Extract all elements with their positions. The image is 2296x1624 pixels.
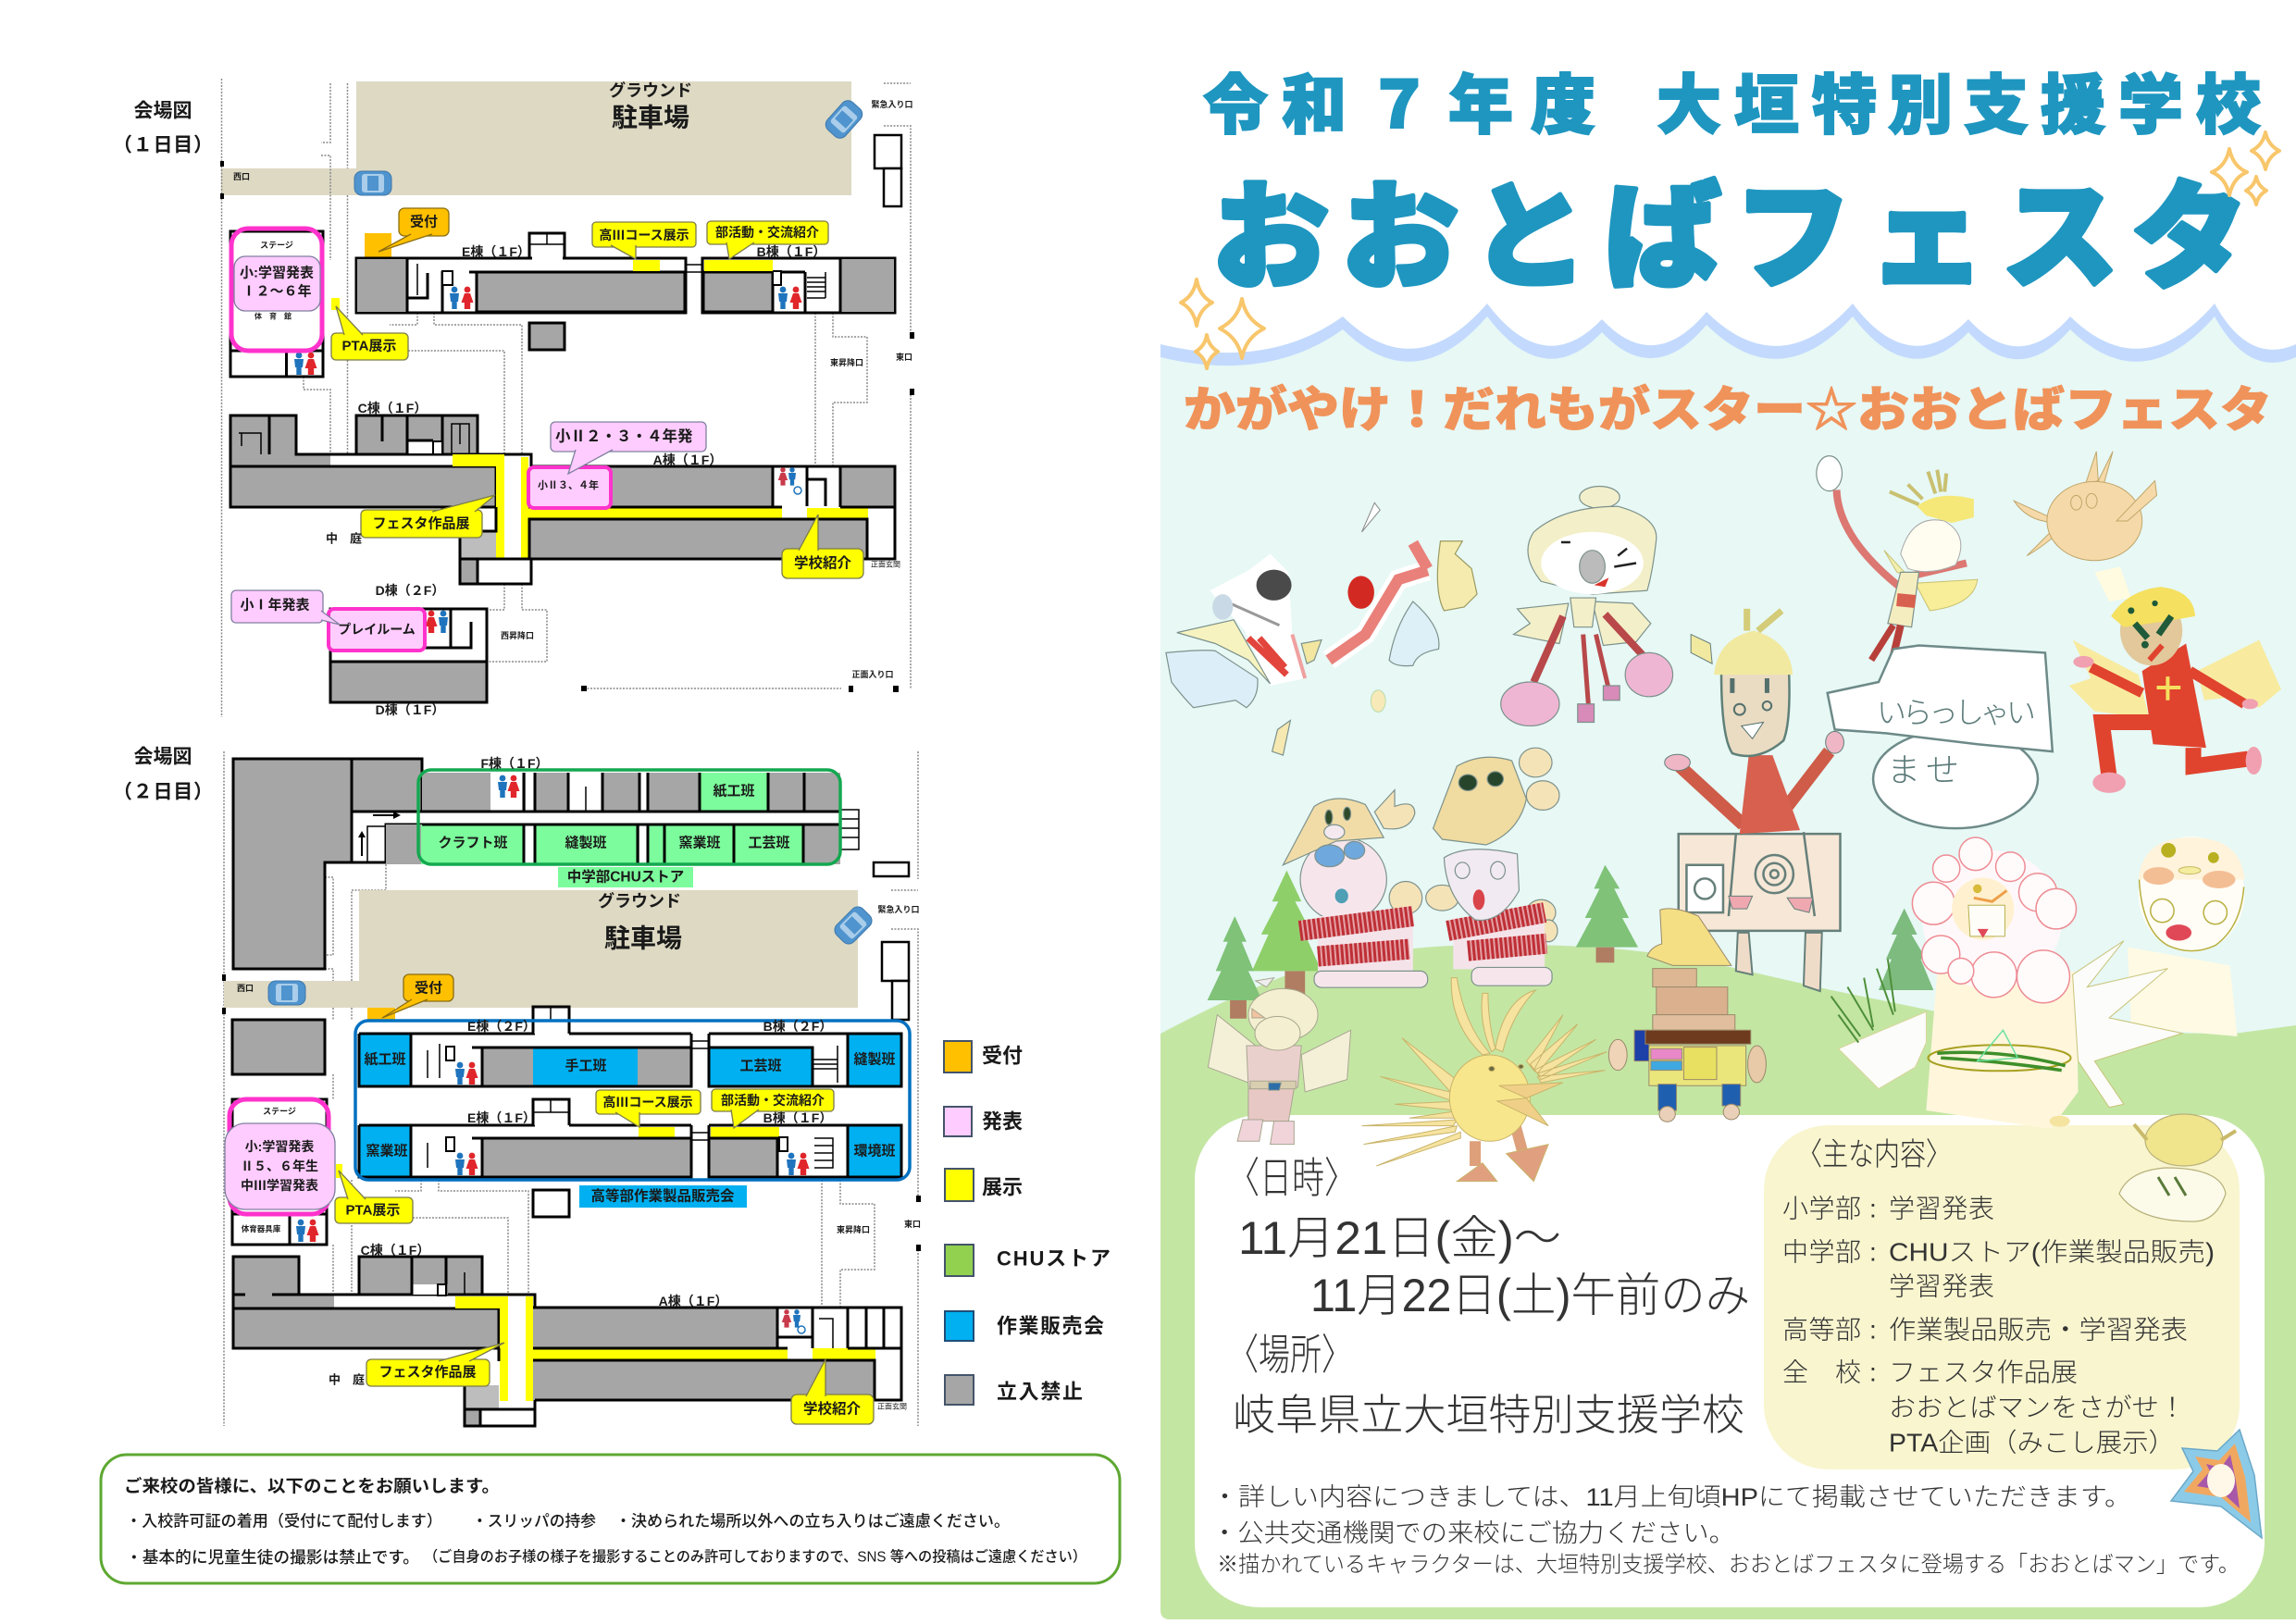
building: gym: 小:学習発表: [240, 265, 314, 281]
callout: festa works exhibit: フェスタ作品展: [372, 516, 470, 531]
building: A wing: 正面玄関: [877, 1401, 907, 1410]
building: E and B wings on two floors: 紙工班: [364, 1051, 406, 1068]
drawing: speech bubble: [1828, 645, 2053, 828]
building: F wing: 縫製班: [565, 835, 607, 851]
text: handwritten speech bubble: いらっしゃい: [1877, 696, 2036, 729]
entrance labels: 緊急入り口: [871, 99, 913, 109]
drawing: cream character bodies: [1839, 941, 2238, 1129]
icon: sparkles left: [1181, 279, 1264, 368]
notes: ・詳しい内容につきましては、11月上旬頃HPにて掲載させていただきます。: [1211, 1483, 2131, 1511]
building: E wing: [356, 233, 686, 313]
notes: ・公共交通機関での来校にご協力ください。: [1211, 1519, 1735, 1547]
drawing: two hooded characters: [1283, 748, 1559, 987]
building: B wing: B棟（１F）: [757, 244, 825, 259]
building: gym: ステージ: [263, 1107, 296, 1116]
text: handwritten speech bubble: ませ: [1887, 751, 1959, 788]
callout: festa works exhibit: [361, 495, 495, 538]
main contents list: PTA企画（みこし展示）: [1889, 1429, 2175, 1457]
event date and place: 11月21日(金)～: [1238, 1212, 1561, 1264]
parking ground: 駐車場: [612, 104, 689, 131]
building: north L-shaped block: [233, 759, 422, 969]
callout: club activities: [712, 1089, 834, 1128]
building: C wing and corridor: C棟（１F）: [361, 1243, 429, 1258]
building: D wing 2F stairwell: [460, 507, 531, 584]
parking ground: 駐車場: [604, 924, 682, 953]
children's drawings, lower right: [1831, 909, 2238, 1129]
drawing: grass: [1831, 960, 1895, 1043]
parking ground: 西口: [237, 984, 254, 993]
panel: festival poster: [1160, 0, 2296, 1619]
heading: venue map day 1: 会場図: [133, 100, 192, 122]
callout: course exhibit: [596, 1090, 701, 1127]
callout: school intro: 学校紹介: [794, 553, 851, 572]
label: high school product sale: 高等部作業製品販売会: [590, 1186, 735, 1205]
building: A wing: A棟（１F）: [653, 452, 722, 467]
notice line 2: [126, 1547, 1086, 1567]
main contents list: :: [1869, 1358, 1877, 1386]
green hill: [1160, 945, 2296, 1619]
parking ground: [224, 890, 858, 1008]
callout: grade 1 presentation: [231, 590, 340, 625]
parking ground: 西口: [233, 172, 250, 181]
legend: reception: [944, 1041, 1023, 1072]
entrance labels: 東口: [896, 352, 912, 362]
callout: course exhibit: 高Ⅲコース展示: [602, 1095, 693, 1110]
callout: school intro: [782, 514, 863, 578]
outbuilding right: [875, 135, 901, 206]
drawing: winged chick: [1208, 978, 1351, 1145]
building: D wing rooms: D棟（２F）: [376, 583, 444, 598]
heading: venue map day 1: （１日目）: [113, 135, 213, 155]
building: E and B wings on two floors: 窯業班: [366, 1142, 408, 1159]
main contents list: 小学部: [1782, 1194, 1861, 1223]
building: F wing: 窯業班: [678, 835, 721, 851]
building: F wing: F棟（１F）: [480, 756, 549, 771]
legend: no entry: [945, 1375, 1083, 1405]
callout: course exhibit: [592, 222, 696, 259]
notice line 1: ・決められた場所以外への立ち入りはご遠慮ください。: [615, 1512, 1010, 1531]
building: E and B wings on two floors: B棟（１F）: [763, 1110, 832, 1125]
white small building: [533, 1190, 569, 1217]
building: E wing: E棟（１F）: [462, 244, 530, 259]
building: F wing: 紙工班: [713, 783, 755, 800]
main contents list: [1782, 1137, 2215, 1457]
building: C wing and corridor: [233, 1243, 535, 1401]
icon: tree beside flower character: [1879, 909, 1933, 990]
heading: venue map day 2: 会場図: [133, 746, 192, 768]
legend: reception: 受付: [982, 1044, 1023, 1068]
drawing: tiny yellow scrap: [2050, 1116, 2070, 1127]
entrance labels: [837, 904, 921, 1234]
building: gym: [230, 229, 323, 377]
main contents list: CHUストア(作業製品販売): [1889, 1238, 2215, 1266]
callout: club activities: 部活動・交流紹介: [721, 1093, 825, 1108]
legend: sale: [945, 1311, 1104, 1341]
icon: cars: [354, 97, 865, 195]
gray block: [232, 1020, 325, 1074]
building: A wing: [528, 452, 900, 568]
icon: sparkles top right: [2212, 132, 2279, 205]
building: gym: ステージ: [260, 241, 293, 250]
legend: presentation: 発表: [982, 1110, 1023, 1133]
drawing: red running character: [2069, 566, 2281, 793]
drawing: star character: [2171, 1430, 2262, 1538]
gray storage block: [529, 323, 565, 350]
label: courtyard: 中 庭: [326, 531, 362, 546]
building: B wing: [686, 244, 895, 313]
panel: venue map day 1: [113, 79, 914, 717]
notice line 1: ・スリッパの持参: [472, 1512, 596, 1531]
building: A wing: 小Ⅱ３、４年: [538, 478, 599, 491]
main contents list: :: [1869, 1194, 1877, 1223]
callout: grades 2-4 presentation: 小Ⅱ２・３・４年発: [555, 427, 693, 445]
children's drawings, lower left: [1208, 909, 1766, 1182]
main contents list: 学習発表: [1889, 1271, 1994, 1301]
building: D wing rooms: プレイルーム: [338, 622, 416, 637]
notice heading: ご来校の皆様に、以下のことをお願いします。: [124, 1477, 500, 1495]
title: school name: 令和７年度大垣特別支援学校: [1203, 69, 2261, 142]
drawing: cream face character: [2139, 837, 2244, 952]
poster background: mint: [1160, 278, 2296, 1619]
drawing: yellow face in contents panel: [2119, 1114, 2236, 1221]
main contents list: フェスタ作品展: [1889, 1358, 2078, 1386]
panel: notice for visitors: [101, 1455, 1120, 1583]
building: F wing: 工芸班: [748, 835, 790, 851]
heading: venue map day 1: [113, 100, 213, 155]
main contents list: 〈主な内容〉: [1796, 1137, 1952, 1172]
callout: festa works exhibit: [366, 1343, 504, 1386]
building: E and B wings on two floors: E棟（１F）: [467, 1110, 536, 1125]
callout: club activities: [707, 221, 828, 259]
drawing: flying character: [1166, 502, 1477, 755]
outbuilding right: [874, 862, 909, 1020]
subtitle: かがやけ！だれもがスター☆おおとばフェスタ: [1184, 383, 2272, 438]
building: D wing stairwell: [465, 1348, 535, 1426]
entrance labels: 西昇降口: [501, 630, 534, 640]
drawing: flower character head: [1912, 837, 2077, 1003]
building: gym: Ⅱ５、６年生: [241, 1159, 318, 1173]
entrance labels: 東昇降口: [830, 357, 863, 367]
panel: venue map day 2: [113, 746, 921, 1426]
building: E and B wings on two floors: 工芸班: [739, 1059, 782, 1073]
main contents list: :: [1869, 1316, 1877, 1344]
callout: school intro: [791, 1359, 874, 1424]
legend: CHU store: [945, 1245, 1111, 1276]
main contents list: 高等部: [1782, 1316, 1861, 1344]
notes: ※描かれているキャラクターは、大垣特別支援学校、おおとばフェスタに登場する「おおとばマン」です。: [1217, 1553, 2240, 1577]
entrance labels: 正面入り口: [851, 670, 894, 679]
reception marker: 受付: [410, 213, 438, 229]
building: E and B wings on two floors: 縫製班: [853, 1051, 896, 1068]
building: C wing and corridor: [230, 401, 531, 559]
legend: presentation: [944, 1107, 1023, 1136]
icon: trees: [1208, 865, 1638, 1019]
reception marker: 受付: [415, 979, 442, 996]
main contents list: 作業製品販売・学習発表: [1889, 1316, 2188, 1344]
children's drawings, upper left: [1166, 486, 1673, 1019]
label: junior high CHU store: 中学部CHUストア: [567, 868, 684, 885]
building: A wing: A棟（１F）: [659, 1294, 727, 1308]
entrance labels: 東口: [904, 1219, 921, 1229]
main contents list: :: [1869, 1238, 1877, 1266]
building: A wing: [533, 1294, 907, 1410]
callout: course exhibit: 高Ⅲコース展示: [599, 228, 689, 242]
label: junior high CHU store: [558, 867, 693, 887]
building: E and B wings on two floors: E棟（２F）: [467, 1019, 536, 1034]
notice line 1: ・入校許可証の着用（受付にて配付します）: [126, 1512, 442, 1531]
drawing: central character with box: [1665, 609, 1843, 991]
callout: festa works exhibit: フェスタ作品展: [379, 1364, 477, 1381]
info card: white: [1195, 1115, 2265, 1607]
drawing: winking character: [1501, 486, 1673, 725]
wave white header: [1160, 0, 2296, 353]
parking ground: グラウンド: [609, 81, 692, 100]
main contents list: 全 校: [1782, 1358, 1861, 1386]
parking ground: [221, 81, 851, 195]
building: C wing and corridor: C棟（１F）: [358, 401, 427, 415]
drawing: block character: [1608, 909, 1766, 1122]
building: F wing: [386, 756, 859, 864]
main contents list: 学習発表: [1889, 1194, 1994, 1223]
notice line 2: ・基本的に児童生徒の撮影は禁止です。: [126, 1548, 419, 1567]
event date and place: [1227, 1154, 1750, 1439]
building: gym: Ⅰ２～６年: [242, 283, 312, 300]
entrance labels: [501, 99, 913, 679]
callout: PTA exhibit: PTA展示: [342, 339, 396, 353]
wave band: [1160, 13, 2296, 366]
event date and place: 〈日時〉: [1227, 1154, 1357, 1202]
legend: sale: 作業販売会: [997, 1314, 1104, 1338]
callout: grade 1 presentation: 小Ⅰ年発表: [240, 596, 310, 613]
walking routes: [222, 751, 921, 1426]
callout: PTA exhibit: [335, 1164, 413, 1223]
heading: venue map day 2: （２日目）: [113, 781, 213, 803]
title: festival name: おおとばフェスタ: [1212, 172, 2248, 304]
building: gym: 体育器具庫: [242, 1224, 281, 1233]
callout: grades 2-4 presentation: [551, 422, 706, 474]
building: gym: [225, 1099, 335, 1245]
building: gym: 中Ⅲ学習発表: [241, 1178, 318, 1193]
text: handwritten speech bubble: [1877, 696, 2036, 788]
notice line 1: [126, 1512, 1010, 1531]
building: E and B wings on two floors: 環境班: [853, 1144, 896, 1159]
notice line 2: （ご自身のお子様の様子を撮影することのみ許可しておりますので、SNS 等への投稿はご遠慮ください）: [424, 1547, 1086, 1566]
label: courtyard: 中 庭: [329, 1373, 365, 1386]
label: high school product sale: [579, 1185, 747, 1208]
building: F wing: クラフト班: [438, 835, 508, 851]
callout: PTA exhibit: PTA展示: [346, 1203, 400, 1218]
notes: [1211, 1483, 2240, 1577]
building: E and B wings on two floors: [355, 1007, 910, 1180]
main contents list: おおとばマンをさがせ！: [1889, 1394, 2186, 1421]
building: E and B wings on two floors: 手工班: [565, 1059, 607, 1073]
main contents list: 中学部: [1782, 1238, 1861, 1266]
drawing: yellow fish: [2014, 452, 2157, 561]
building: gym: 体育館: [254, 311, 299, 320]
callout: club activities: 部活動・交流紹介: [715, 225, 819, 240]
walking routes: [220, 79, 914, 717]
drawing: arm-raised character: [1817, 456, 1978, 663]
drawing: yellow feathered bird: [1361, 978, 1607, 1182]
event date and place: 11月22日(土)午前のみ: [1310, 1270, 1750, 1321]
entrance labels: 緊急入り口: [877, 904, 920, 914]
children's drawings, upper right: [1665, 452, 2281, 991]
building: gym: 小:学習発表: [245, 1139, 314, 1154]
event date and place: 岐阜県立大垣特別支援学校: [1233, 1391, 1744, 1439]
info card: contents panel: [1764, 1125, 2240, 1469]
building: A wing: 正面玄関: [871, 559, 900, 568]
parking ground: グラウンド: [598, 891, 681, 911]
callout: school intro: 学校紹介: [803, 1399, 861, 1418]
legend: exhibit: [945, 1169, 1023, 1201]
event date and place: 〈場所〉: [1227, 1331, 1353, 1379]
icon: cars: [268, 904, 875, 1005]
reception marker: [365, 208, 449, 257]
heading: venue map day 2: [113, 746, 213, 803]
children's drawings, flower and cream heads: [1912, 837, 2244, 1003]
reception marker: [367, 974, 453, 1021]
legend: exhibit: 展示: [982, 1175, 1023, 1199]
callout: PTA exhibit: [331, 298, 408, 360]
entrance labels: 東昇降口: [837, 1224, 870, 1234]
building: D wing rooms: [329, 583, 487, 717]
legend: [944, 1041, 1111, 1405]
building: D wing rooms: D棟（１F）: [376, 702, 444, 717]
building: E and B wings on two floors: B棟（２F）: [763, 1019, 832, 1034]
legend: no entry: 立入禁止: [997, 1381, 1083, 1403]
legend: CHU store: CHUストア: [997, 1247, 1111, 1270]
